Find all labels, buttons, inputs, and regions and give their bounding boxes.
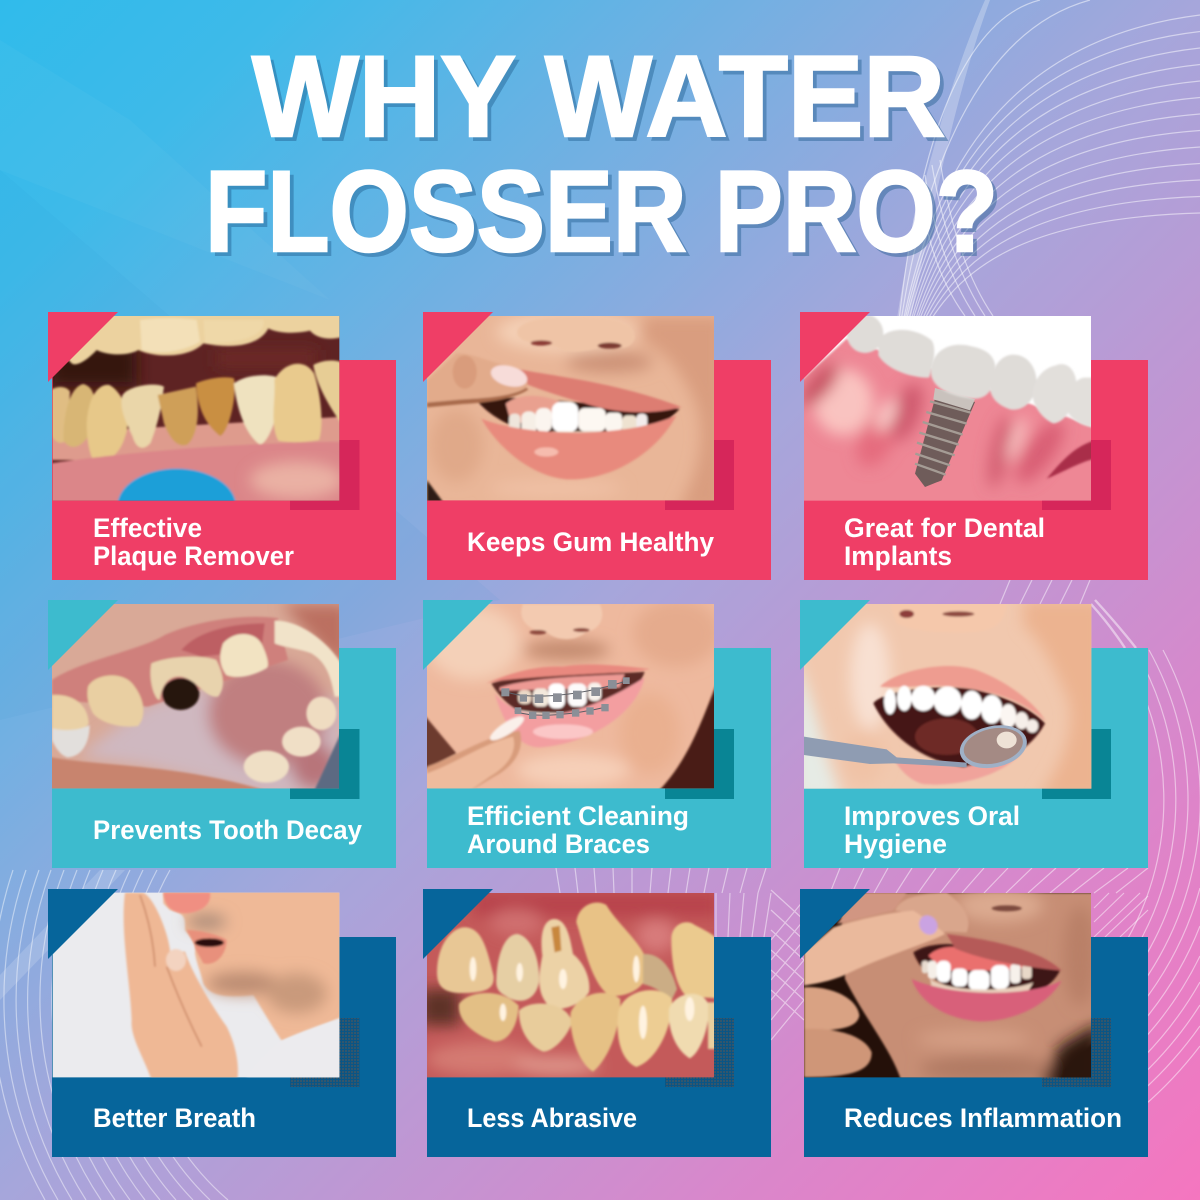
card: Improves Oral Hygiene <box>793 600 1148 868</box>
title: FLOSSER PRO? <box>205 148 998 276</box>
corner triangle <box>800 312 870 382</box>
label: Effective <box>93 513 202 543</box>
card: Better Breath <box>48 889 396 1157</box>
photo: dental implant <box>804 316 1091 500</box>
label: Prevents Tooth Decay <box>93 815 362 845</box>
dental mirror <box>804 719 1031 774</box>
corner triangle <box>800 889 870 959</box>
photo: receding gums <box>427 893 714 1078</box>
label <box>844 513 1045 571</box>
panel: teal backing <box>427 648 771 868</box>
label <box>93 513 294 571</box>
label: Hygiene <box>844 829 947 859</box>
corner triangle <box>423 889 493 959</box>
corner triangle <box>423 600 493 670</box>
panel: red backing <box>52 360 396 580</box>
title: FLOSSER PRO? <box>209 152 1002 280</box>
panel: red backing <box>427 360 771 580</box>
wave lines: lower right <box>556 580 1200 1150</box>
corner triangle <box>48 312 118 382</box>
label: Plaque Remover <box>93 541 294 571</box>
label <box>844 801 1020 859</box>
title: WHY WATER <box>256 37 949 165</box>
photo: open mouth with dental mirror <box>804 604 1092 789</box>
corner triangle <box>48 889 118 959</box>
label: Efficient Cleaning <box>467 801 689 831</box>
wave lines: lower left <box>0 870 228 1200</box>
panel: red backing <box>804 360 1148 580</box>
panel: navy backing <box>427 937 771 1157</box>
accent block <box>1042 729 1111 799</box>
card: Great for Dental Implants <box>795 312 1148 580</box>
photo: smile with braces <box>427 604 714 788</box>
label: Reduces Inflammation <box>844 1103 1122 1133</box>
card: Prevents Tooth Decay <box>48 600 396 868</box>
label: Around Braces <box>467 829 650 859</box>
accent block <box>1042 440 1111 510</box>
panel: teal backing <box>52 648 396 868</box>
photo: smile with lifted lip <box>427 316 714 500</box>
label: Improves Oral <box>844 801 1020 831</box>
implant screw <box>915 345 996 487</box>
panel: navy backing <box>804 937 1148 1157</box>
panel: teal backing <box>804 648 1148 868</box>
accent block <box>665 729 734 799</box>
corner triangle <box>423 312 493 382</box>
panel: navy backing <box>52 937 396 1157</box>
label: Implants <box>844 541 952 571</box>
card: Effective Plaque Remover <box>48 312 396 580</box>
photo: man checking breath <box>52 892 340 1078</box>
accent block <box>290 440 360 510</box>
corner triangle <box>48 600 118 670</box>
photo: stained lower teeth <box>52 316 340 501</box>
wave lines: top right <box>893 0 1200 350</box>
card: Less Abrasive <box>420 889 771 1157</box>
title: WHY WATER <box>252 33 945 161</box>
card: Efficient Cleaning Around Braces <box>423 600 771 868</box>
label: Better Breath <box>93 1103 256 1133</box>
photo: inflamed gums <box>804 893 1091 1078</box>
label: Great for Dental <box>844 513 1045 543</box>
accent block <box>290 729 360 799</box>
corner triangle <box>800 600 870 670</box>
accent block <box>290 1018 360 1087</box>
background facets <box>0 40 500 720</box>
label: Keeps Gum Healthy <box>467 527 714 557</box>
card: Keeps Gum Healthy <box>423 312 771 580</box>
braces wires <box>501 677 630 719</box>
accent block <box>1042 1018 1111 1087</box>
label <box>467 801 689 859</box>
label: Less Abrasive <box>467 1103 637 1133</box>
accent block <box>665 1018 734 1087</box>
accent block <box>665 440 734 510</box>
title <box>205 33 1002 280</box>
photo: decayed tooth <box>52 604 339 788</box>
card: Reduces Inflammation <box>800 889 1148 1157</box>
